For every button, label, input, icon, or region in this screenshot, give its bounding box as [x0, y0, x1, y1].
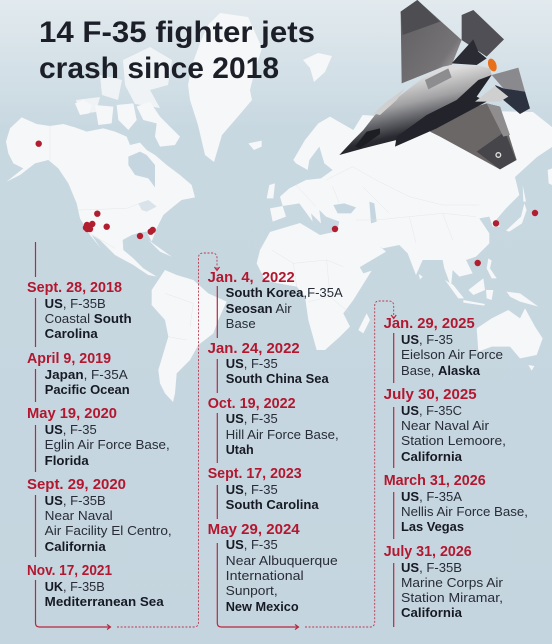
event: Sept. 17, 2023	[208, 466, 319, 512]
event: May 29, 2024: US, F-35	[226, 537, 278, 552]
event: Jan. 24, 2022: South China Sea	[226, 371, 329, 386]
event: Sept. 28, 2018: Carolina	[45, 326, 98, 341]
icon: F-35 fighter jet	[339, 0, 530, 169]
map: Southeast Asia and Australia	[445, 258, 543, 371]
event: July 30, 2025	[384, 387, 506, 464]
crash location markers	[36, 140, 538, 266]
event: Oct. 19, 2022: Hill Air Force Base,	[226, 427, 339, 442]
event: May 19, 2020: Florida	[45, 453, 89, 468]
event: July 30, 2025: US, F-35C	[401, 403, 462, 418]
event: April 9, 2019: Pacific Ocean	[45, 382, 130, 397]
event: Jan. 29, 2025: Base, Alaska	[401, 363, 481, 378]
event: Jan. 4, 2022: Seosan Air	[226, 301, 292, 316]
event: March 31, 2026: Nellis Air Force Base,	[401, 504, 528, 519]
event: Jan. 4, 2022: Base	[226, 316, 256, 331]
event: May 29, 2024: International	[226, 568, 304, 583]
event: April 9, 2019: April 9, 2019	[27, 351, 111, 367]
event: Nov. 17, 2021: UK, F-35B	[45, 579, 105, 594]
map: Greenland	[188, 13, 262, 162]
event: Sept. 17, 2023: South Carolina	[226, 497, 319, 512]
event: Sept. 28, 2018: US, F-35B	[45, 296, 106, 311]
event: Sept. 29, 2020: Sept. 29, 2020	[27, 477, 126, 493]
event: May 19, 2020: Eglin Air Force Base,	[45, 437, 170, 452]
map: North America	[6, 100, 262, 277]
event: Oct. 19, 2022	[208, 396, 339, 457]
map: Arctic Canada islands	[76, 47, 172, 114]
event: Jan. 29, 2025: Jan. 29, 2025	[384, 316, 475, 332]
timeline connector 1	[36, 242, 220, 630]
event: Sept. 28, 2018	[27, 280, 132, 341]
event: Sept. 17, 2023: Sept. 17, 2023	[208, 466, 302, 482]
title: crash since 2018	[39, 52, 279, 85]
event: May 29, 2024: Sunport,	[226, 583, 278, 598]
event: Jan. 29, 2025: Eielson Air Force	[401, 347, 503, 362]
event: July 31, 2026: Station Miramar,	[401, 590, 503, 605]
event: Jan. 24, 2022: Jan. 24, 2022	[208, 341, 300, 357]
event: Sept. 29, 2020: US, F-35B	[45, 493, 106, 508]
event: July 31, 2026: US, F-35B	[401, 560, 462, 575]
map: Svalbard	[303, 53, 332, 82]
event: Jan. 24, 2022: US, F-35	[226, 356, 278, 371]
event: May 19, 2020: May 19, 2020	[27, 406, 117, 422]
event: April 9, 2019: Japan, F-35A	[45, 367, 128, 382]
event: May 29, 2024: Near Albuquerque	[226, 553, 338, 568]
title	[39, 16, 315, 85]
event: Sept. 29, 2020	[27, 477, 172, 554]
event: July 30, 2025: Station Lemoore,	[401, 433, 506, 448]
event: Sept. 28, 2018: Coastal South	[45, 311, 132, 326]
event: Nov. 17, 2021	[27, 563, 164, 609]
event: Oct. 19, 2022: US, F-35	[226, 411, 278, 426]
timeline column 2	[208, 270, 396, 630]
event: July 30, 2025: Near Naval Air	[401, 418, 490, 433]
event: Jan. 29, 2025	[384, 316, 503, 378]
event: July 30, 2025: July 30, 2025	[384, 387, 477, 403]
map: Eurasia	[267, 110, 552, 287]
event: July 31, 2026: Marine Corps Air	[401, 575, 504, 590]
event: Nov. 17, 2021: Nov. 17, 2021	[27, 563, 112, 579]
event: Jan. 4, 2022	[208, 270, 343, 331]
event: March 31, 2026: US, F-35A	[401, 489, 462, 504]
timeline column 1	[27, 242, 220, 630]
world map	[6, 13, 552, 402]
timeline column 3	[384, 316, 528, 627]
event: Jan. 29, 2025: US, F-35	[401, 332, 453, 347]
timeline connector 3	[393, 333, 395, 627]
event: Sept. 29, 2020: Air Facility El Centro,	[45, 523, 172, 538]
event: May 19, 2020	[27, 406, 170, 468]
event: March 31, 2026: March 31, 2026	[384, 473, 486, 489]
event: Oct. 19, 2022: Utah	[226, 442, 254, 457]
event: July 31, 2026: California	[401, 605, 463, 620]
event: March 31, 2026: Las Vegas	[401, 519, 464, 534]
event: Nov. 17, 2021: Mediterranean Sea	[45, 594, 164, 609]
event: Jan. 24, 2022	[208, 341, 329, 386]
event: Sept. 17, 2023: US, F-35	[226, 482, 278, 497]
event: Sept. 29, 2020: California	[45, 539, 106, 554]
event: May 19, 2020: US, F-35	[45, 422, 97, 437]
title: 14 F-35 fighter jets	[39, 16, 315, 49]
event: April 9, 2019	[27, 351, 130, 397]
event: Oct. 19, 2022: Oct. 19, 2022	[208, 396, 296, 412]
event: Jan. 4, 2022: South Korea,F-35A	[226, 285, 343, 300]
event: May 29, 2024: New Mexico	[226, 599, 299, 614]
event: July 31, 2026	[384, 544, 504, 620]
event: July 30, 2025: California	[401, 449, 463, 464]
timeline connector 2	[217, 286, 396, 630]
map: South America and Africa	[152, 223, 372, 402]
event: Jan. 4, 2022: Jan. 4, 2022	[208, 270, 295, 286]
event: May 29, 2024	[208, 522, 338, 614]
event: March 31, 2026	[384, 473, 528, 534]
event: Sept. 28, 2018: Sept. 28, 2018	[27, 280, 122, 296]
event: May 29, 2024: May 29, 2024	[208, 522, 300, 538]
event: Sept. 29, 2020: Near Naval	[45, 508, 113, 523]
event: July 31, 2026: July 31, 2026	[384, 544, 472, 560]
